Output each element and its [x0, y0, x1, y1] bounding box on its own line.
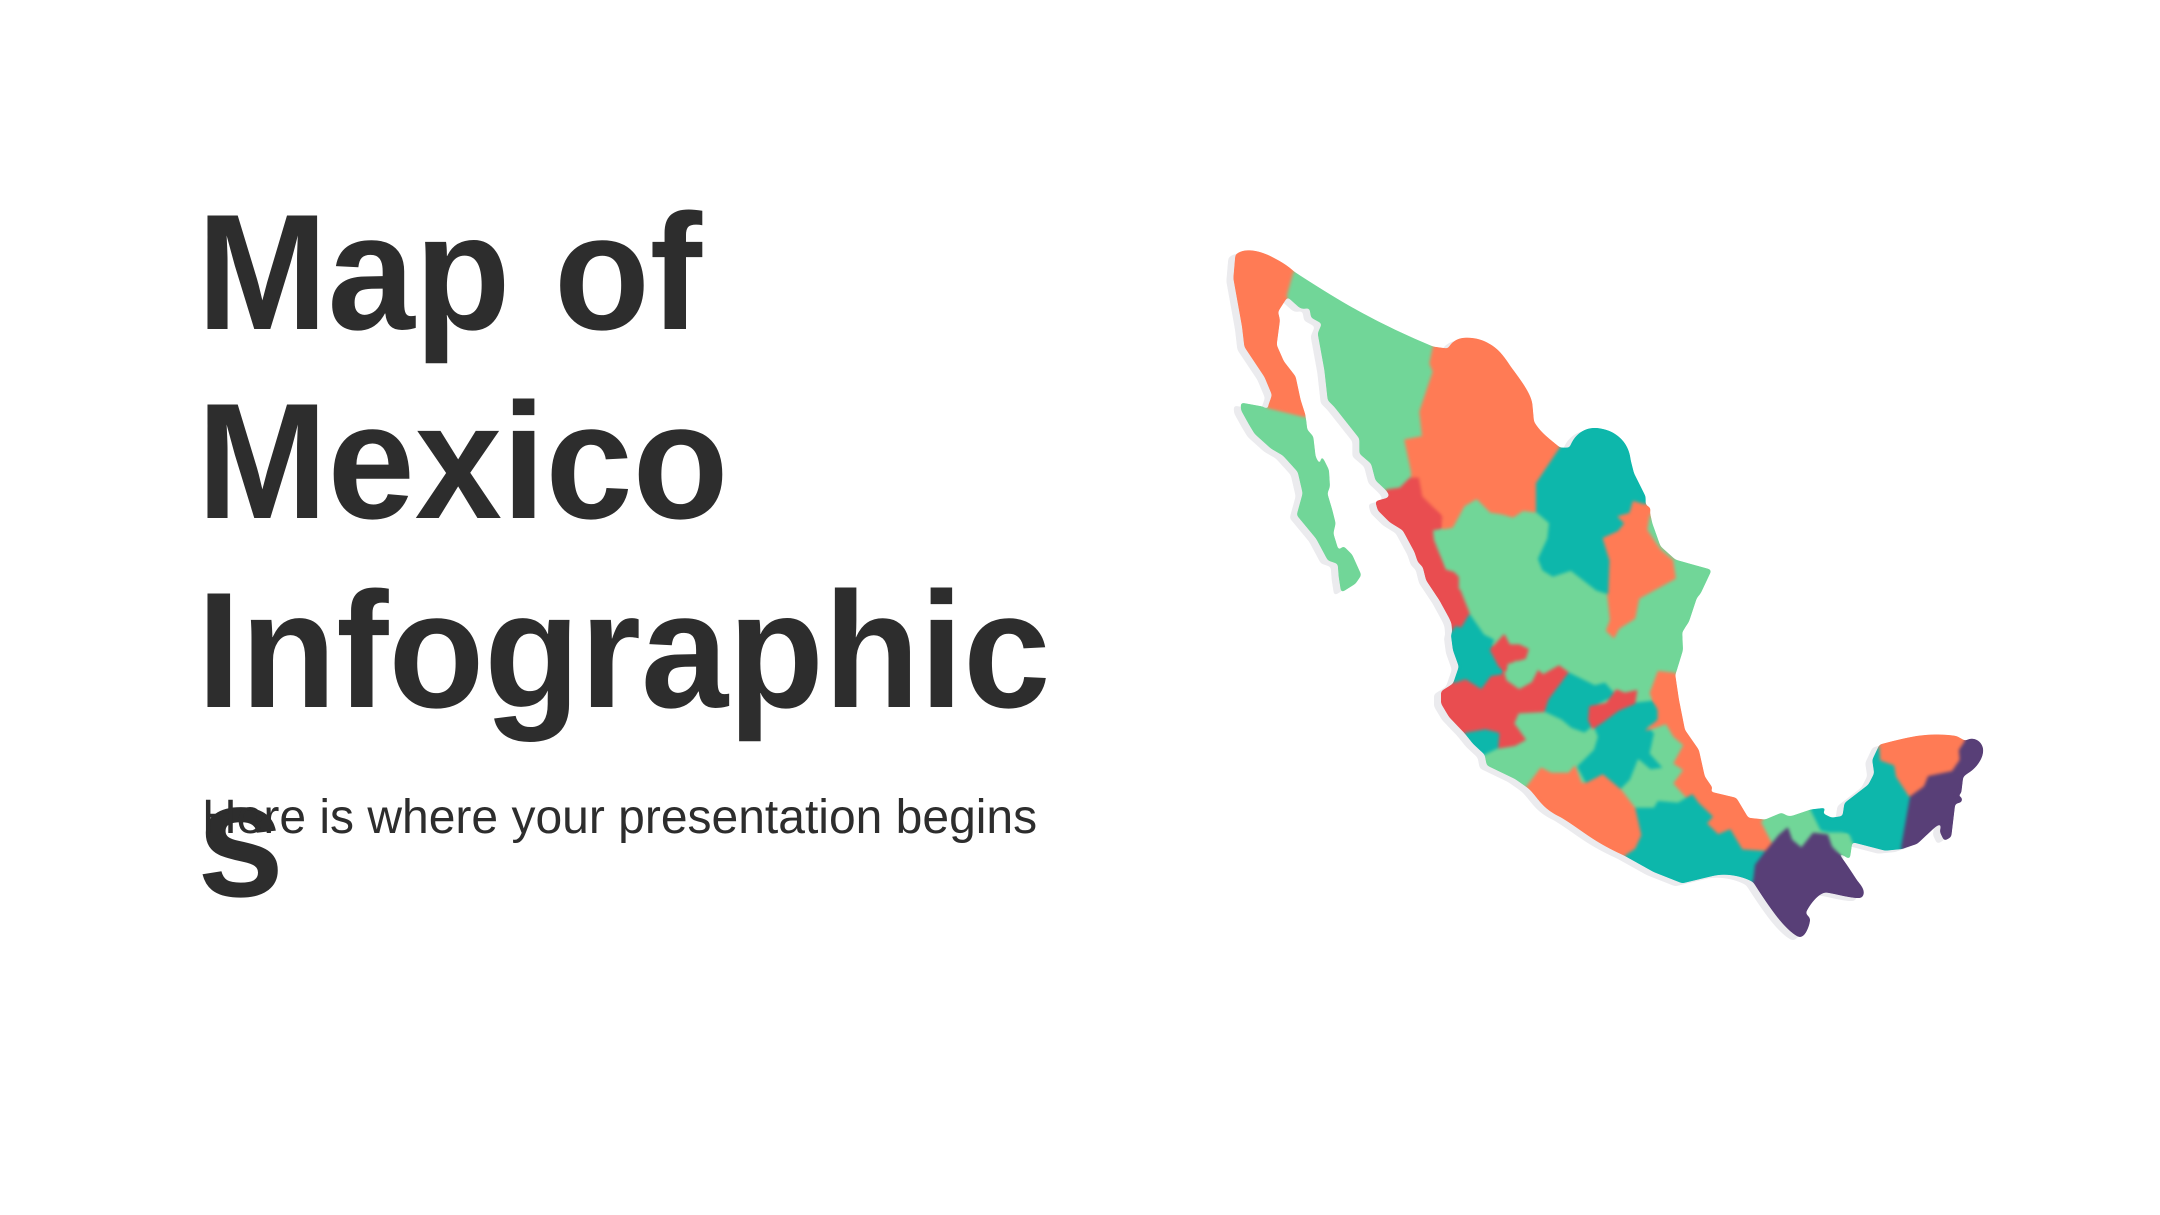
region: Michoacan — [1485, 713, 1599, 787]
region: Colima — [1466, 730, 1499, 754]
northern states — [1234, 251, 1711, 630]
subtitle: Here is where your presentation begins — [202, 791, 1037, 844]
region: Quintana Roo — [1902, 739, 1982, 848]
region: Tabasco — [1762, 810, 1852, 858]
region: Coahuila — [1537, 429, 1645, 593]
title: Map of — [197, 180, 702, 364]
title: Mexico — [197, 369, 728, 553]
region: Aguascalientes — [1505, 662, 1537, 688]
map of Mexico — [1234, 251, 1982, 937]
region: Veracruz — [1646, 672, 1774, 851]
region: Guerrero — [1527, 767, 1640, 855]
region: Baja California Sur — [1241, 403, 1361, 592]
region: Sinaloa — [1376, 478, 1468, 630]
region: Durango — [1432, 500, 1608, 630]
region: Oaxaca — [1625, 795, 1766, 883]
region: Chiapas — [1754, 828, 1863, 937]
title: Infographic — [197, 558, 1050, 742]
region: Sinaloa south — [1436, 590, 1470, 632]
region: Tamaulipas — [1620, 508, 1711, 630]
region: Hidalgo and Mexico state — [1578, 702, 1662, 790]
region: central underlay — [1479, 673, 1686, 820]
region: Baja California — [1234, 251, 1305, 417]
region: Coahuila south — [1539, 560, 1609, 593]
region: Queretaro — [1589, 690, 1636, 728]
region: Tlaxcala — [1650, 723, 1684, 767]
region: Nuevo Leon — [1603, 502, 1673, 630]
region: Sonora — [1287, 272, 1433, 490]
region: Campeche — [1811, 745, 1911, 850]
region: Puebla — [1621, 760, 1686, 808]
region: Nayarit — [1452, 615, 1501, 690]
region: Yucatan — [1880, 735, 1965, 796]
region: Jalisco — [1442, 635, 1569, 749]
region: central plateau — [1444, 560, 1710, 710]
title: s — [197, 747, 284, 931]
region: Nuevo Leon south — [1607, 560, 1675, 637]
southern states — [1436, 560, 1982, 937]
region: Chihuahua — [1405, 338, 1560, 530]
title — [197, 180, 1050, 931]
region: Guanajuato — [1545, 673, 1615, 733]
